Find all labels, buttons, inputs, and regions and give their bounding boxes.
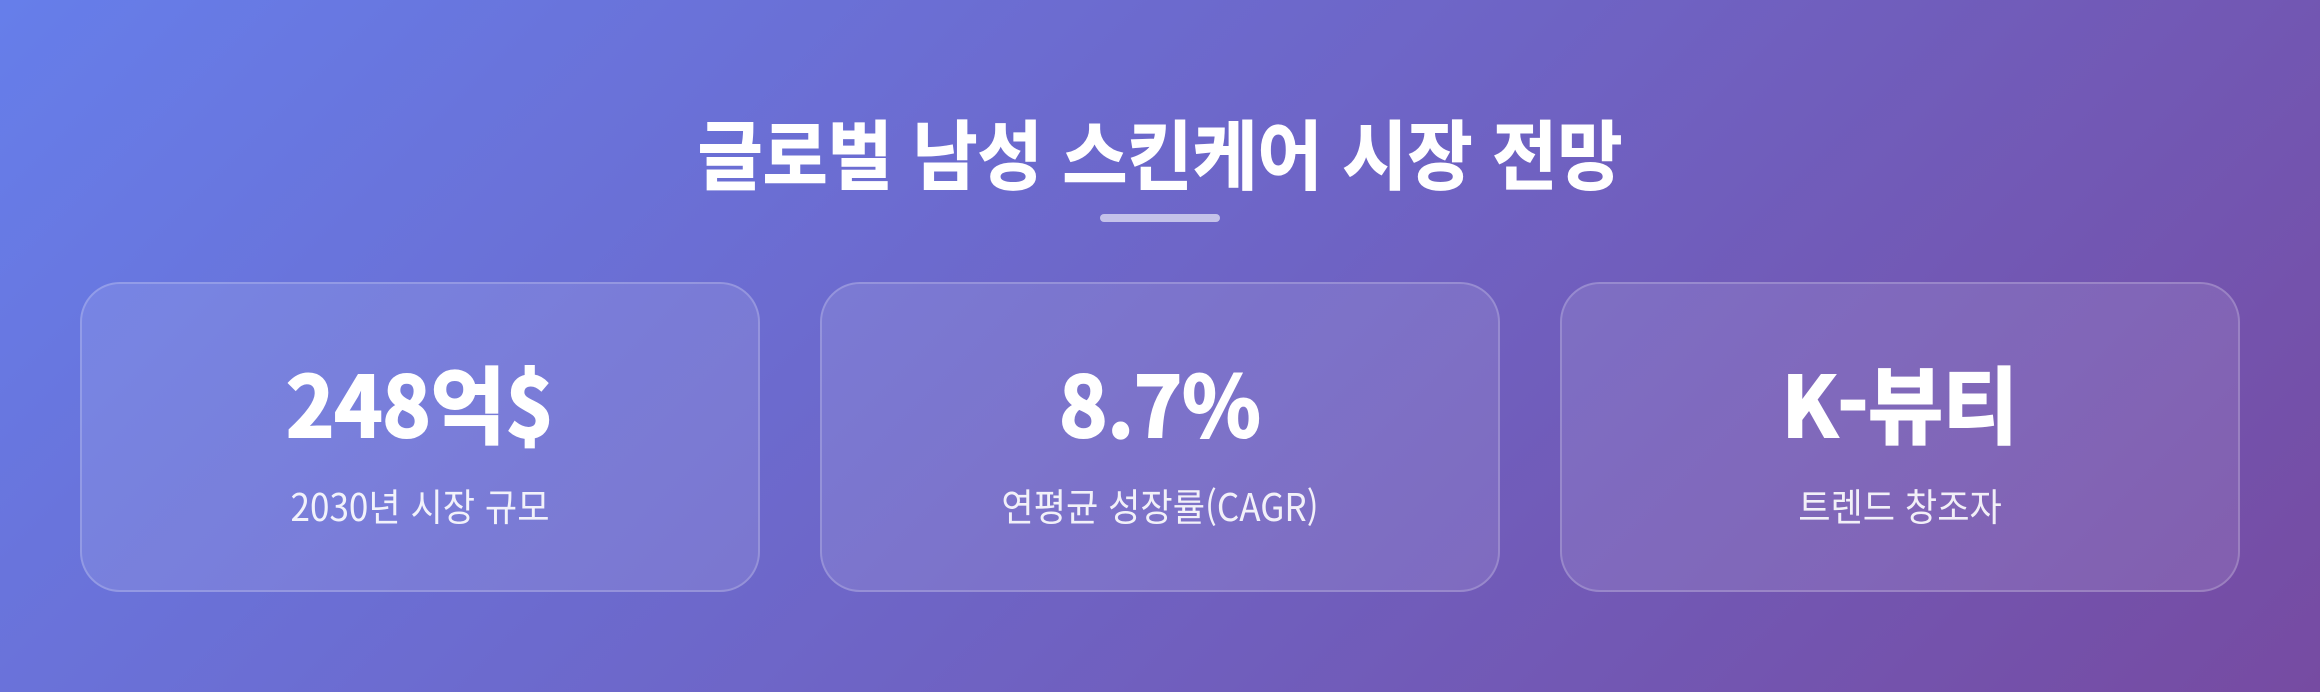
panel: K-beauty [1560,282,2240,592]
label: growth rate: 연평균 성장률(CAGR) [1001,477,1319,533]
panel: growth rate [820,282,1500,592]
label: market size: 2030년 시장 규모 [290,477,550,533]
panel: market size [80,282,760,592]
title underline [1100,214,1220,222]
value: growth rate: 8.7% [1059,341,1261,462]
title: 글로벌 남성 스킨케어 시장 전망 [698,95,1622,205]
value: market size: 248억$ [286,341,554,462]
label: K-beauty: 트렌드 창조자 [1798,477,2002,533]
value: K-beauty: K-뷰티 [1782,341,2018,462]
